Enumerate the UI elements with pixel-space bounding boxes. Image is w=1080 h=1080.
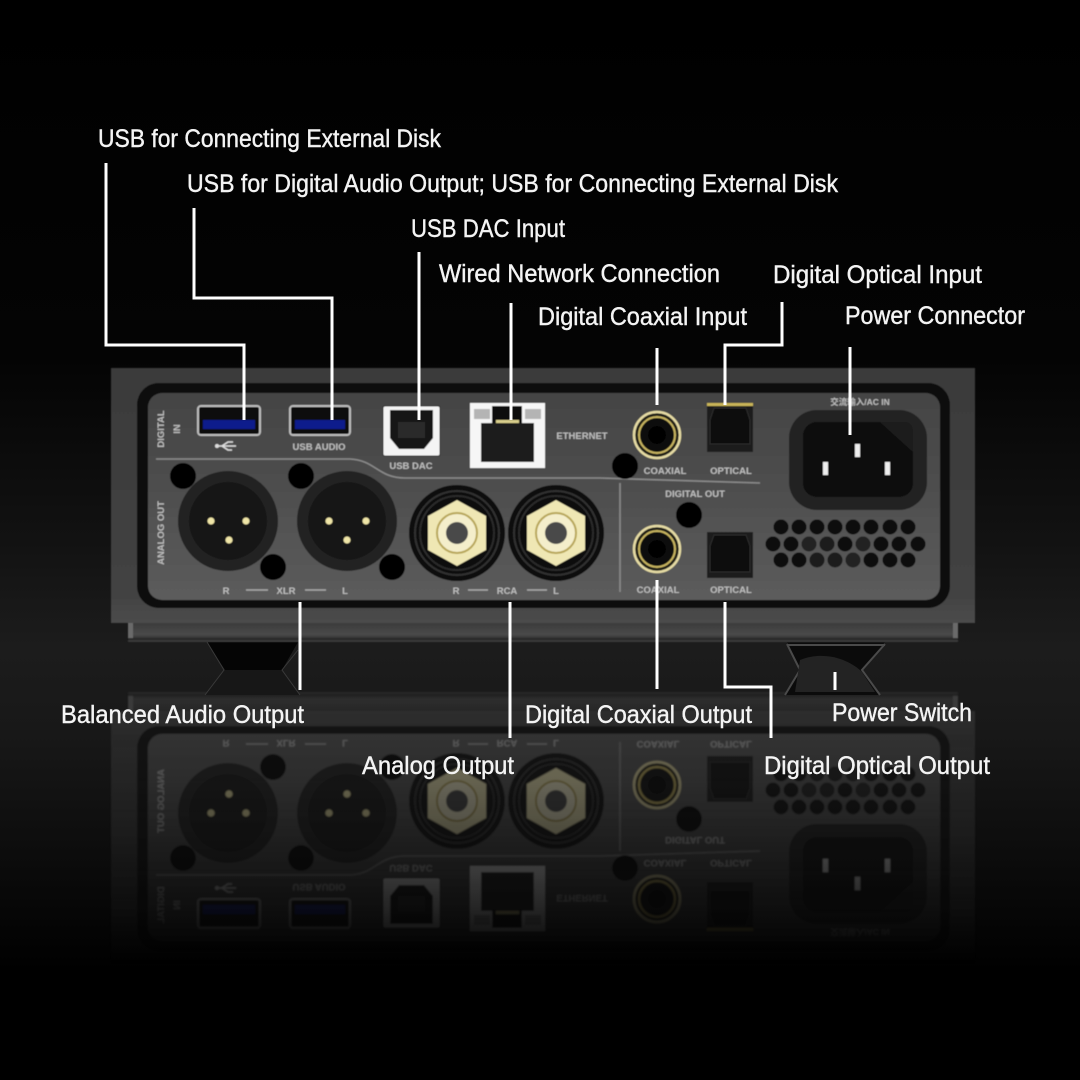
- XLR RCA channel labels: RCA: [497, 586, 517, 597]
- leader line: balanced output: [298, 602, 302, 690]
- label: USB audio output: USB for Digital Audio Output; USB for Connecting External Disk: [187, 170, 838, 198]
- label: digital optical output: Digital Optical Output: [764, 752, 990, 780]
- foot: right: [785, 642, 885, 695]
- optical input: [707, 403, 753, 477]
- leader line: network: [510, 303, 512, 420]
- USB port 1: [198, 406, 260, 450]
- under chassis: [128, 623, 958, 642]
- label: digital coaxial output: Digital Coaxial Output: [525, 701, 752, 729]
- XLR screw holes: [170, 463, 405, 580]
- vent holes: [766, 520, 926, 568]
- label: digital optical input: Digital Optical Input: [773, 261, 982, 289]
- XLR RCA channel labels: [223, 586, 559, 597]
- foot: left: [205, 642, 300, 695]
- reflection of rear panel: [111, 692, 975, 936]
- XLR RCA channel labels: L: [342, 586, 348, 597]
- label: power switch: Power Switch: [832, 699, 972, 727]
- leader line: coaxial input: [656, 348, 658, 405]
- AC inlet: 交流输入/AC IN: [830, 397, 890, 407]
- divider lines: [156, 459, 760, 592]
- recess: [137, 383, 950, 608]
- leader line: optical input: [725, 302, 782, 405]
- section label: analog out: ANALOG OUT: [156, 501, 167, 565]
- leader line: USB external disk: [106, 163, 244, 420]
- infographic canvas: [0, 128, 1080, 937]
- label: power connector: Power Connector: [845, 302, 1025, 330]
- label: USB external disk: USB for Connecting External Disk: [98, 125, 441, 153]
- leader line: analog output: [508, 602, 512, 738]
- USB DAC port: USB DAC: [389, 461, 433, 472]
- screw hole: [612, 453, 638, 479]
- label: balanced audio output: Balanced Audio Output: [61, 701, 304, 729]
- leader line: coaxial output: [656, 580, 658, 689]
- leader line: power switch: [834, 672, 836, 690]
- XLR RCA channel labels: L: [553, 586, 559, 597]
- XLR RCA channel labels: R: [223, 586, 230, 597]
- label: analog output: Analog Output: [362, 752, 514, 780]
- rear panel device: [111, 368, 975, 642]
- label: wired network: Wired Network Connection: [439, 260, 720, 288]
- USB port 2: [290, 406, 350, 453]
- XLR L: [297, 471, 397, 571]
- coaxial output: COAXIAL: [637, 585, 680, 596]
- RCA R: [409, 485, 505, 581]
- ethernet port: ETHERNET: [556, 431, 608, 442]
- leader line: power connector: [848, 347, 852, 435]
- section label: digital in: DIGITAL: [156, 410, 167, 448]
- digital out label: DIGITAL OUT: [665, 489, 725, 500]
- label: digital coaxial input: Digital Coaxial Input: [538, 303, 747, 331]
- XLR RCA channel labels: XLR: [276, 586, 296, 597]
- coaxial input: COAXIAL: [644, 466, 687, 477]
- USB DAC port: [383, 406, 440, 472]
- optical input: OPTICAL: [710, 466, 752, 477]
- label: USB DAC input: USB DAC Input: [411, 215, 565, 243]
- RCA L: [508, 485, 604, 581]
- leader line: optical output: [725, 602, 771, 738]
- AC inlet: [789, 397, 927, 510]
- optical output: [707, 532, 753, 596]
- back plate: [111, 368, 975, 623]
- optical output: OPTICAL: [710, 585, 752, 596]
- screw hole: [676, 502, 702, 528]
- XLR RCA channel labels: R: [453, 586, 460, 597]
- leader line: USB audio: [194, 208, 332, 420]
- leader line: USB DAC: [418, 252, 420, 420]
- USB port 2: USB AUDIO: [293, 442, 345, 453]
- panel face: [148, 393, 940, 600]
- section label: in: IN: [172, 424, 183, 434]
- coaxial output: [634, 526, 680, 596]
- XLR R: [178, 471, 278, 571]
- coaxial input: [634, 412, 687, 477]
- ethernet port: [470, 403, 608, 468]
